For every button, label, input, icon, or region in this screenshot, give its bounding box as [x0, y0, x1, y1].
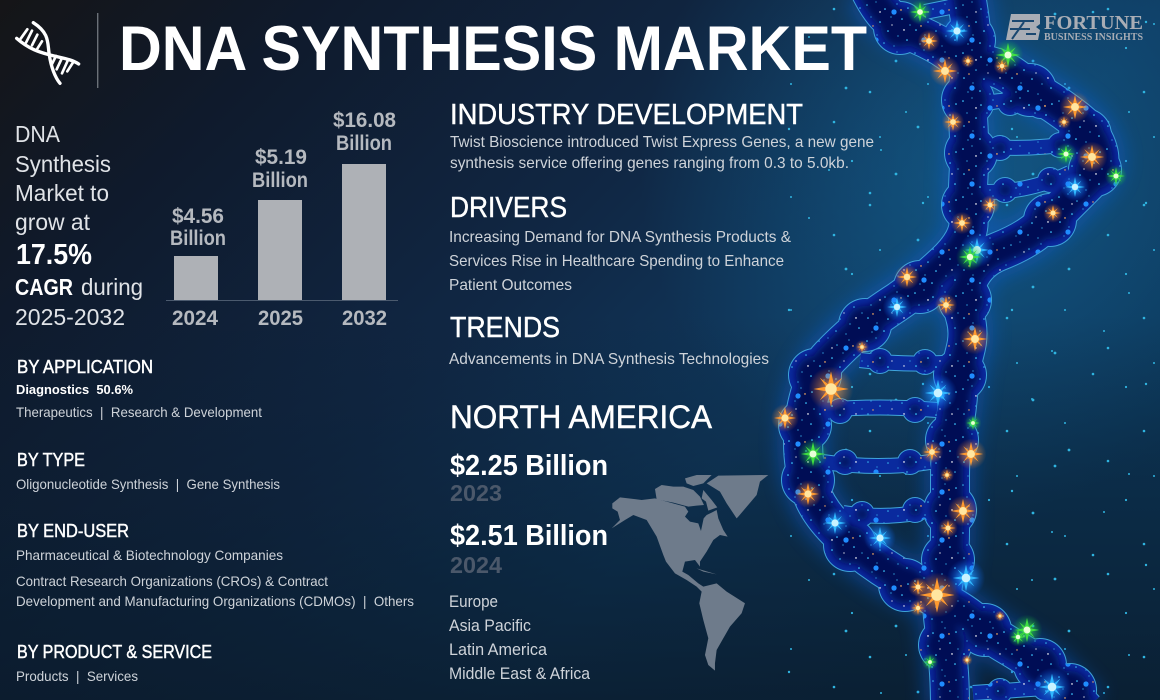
panel: industry development: Twist Bioscience introduced Twist Express Genes, a new gene: [450, 134, 874, 151]
year labels: 2032: [342, 307, 387, 330]
header divider: [97, 13, 98, 88]
value 2024: [450, 520, 608, 578]
panel: by end-user: Development and Manufacturing Organizations (CDMOs) | Others: [16, 593, 414, 609]
panel: by application: BY APPLICATION: [17, 357, 153, 377]
panel: by product and service: [16, 642, 212, 684]
panel: by end-user: BY END-USER: [17, 521, 129, 541]
value 2024: $2.51 Billion: [450, 520, 608, 552]
scattered particles: [770, 0, 1160, 700]
headline: cagr statement: CAGR: [15, 274, 73, 300]
panel: drivers: Services Rise in Healthcare Spending to Enhance: [449, 253, 784, 270]
headline: cagr statement: 2025-2032: [15, 304, 125, 330]
value 2023: 2023: [450, 480, 502, 506]
title: DNA SYNTHESIS MARKET: [119, 14, 867, 84]
panel: drivers: DRIVERS: [450, 192, 567, 224]
headline: cagr statement: grow at: [15, 209, 91, 235]
value labels: $16.08: [333, 109, 396, 132]
year labels: 2024: [172, 307, 218, 330]
panel: by product and service: Products | Services: [16, 668, 138, 684]
headline: cagr statement: [15, 121, 143, 330]
panel: by type: [16, 450, 280, 492]
value labels: $5.19: [255, 146, 307, 169]
headline: cagr statement: during: [81, 274, 143, 300]
other regions list: Europe: [449, 592, 498, 611]
headline: cagr statement: 17.5%: [16, 239, 92, 271]
panel: industry development: INDUSTRY DEVELOPMENT: [450, 99, 803, 131]
panel: by application: [16, 357, 262, 420]
logo: fortune business insights: BUSINESS INSIGHTS: [1044, 32, 1143, 43]
headline: cagr statement: Market to: [15, 180, 109, 206]
panel: north america: NORTH AMERICA: [450, 399, 713, 435]
bar chart: market size: [166, 109, 398, 330]
panel: by end-user: Pharmaceutical & Biotechnology Companies: [16, 547, 283, 563]
logo: fortune business insights: FORTUNE: [1044, 12, 1143, 34]
panel: trends: TRENDS: [450, 312, 560, 344]
value labels: [170, 109, 396, 250]
icon: dna: [17, 23, 79, 83]
panel: industry development: [450, 99, 874, 172]
bar 2025: [258, 200, 302, 300]
other regions list: Asia Pacific: [449, 616, 531, 635]
panel: by type: BY TYPE: [17, 450, 85, 470]
bar 2032: [342, 164, 386, 300]
other regions list: [449, 592, 591, 683]
value 2024: 2024: [450, 552, 502, 578]
other regions list: Latin America: [449, 640, 548, 659]
panel: by product and service: BY PRODUCT & SERVICE: [17, 642, 212, 662]
bar 2024: [174, 256, 218, 300]
panel: north america: [450, 399, 713, 578]
headline: cagr statement: Synthesis: [15, 151, 111, 177]
other regions list: Middle East & Africa: [449, 664, 591, 683]
map: americas: [612, 475, 768, 671]
year labels: [172, 307, 387, 330]
panel: drivers: Increasing Demand for DNA Synthesis Products &: [449, 229, 791, 246]
panel: drivers: Patient Outcomes: [449, 277, 572, 294]
panel: trends: Advancements in DNA Synthesis Technologies: [449, 351, 769, 368]
panel: by type: Oligonucleotide Synthesis | Gene Synthesis: [16, 476, 280, 492]
value labels: Billion: [170, 227, 226, 250]
panel: by end-user: Contract Research Organizations (CROs) & Contract: [16, 573, 328, 589]
value labels: Billion: [336, 132, 392, 155]
panel: by application: Diagnostics 50.6%: [16, 382, 133, 397]
year labels: 2025: [258, 307, 303, 330]
value labels: Billion: [252, 169, 308, 192]
panel: by end-user: [16, 521, 414, 609]
value 2023: [450, 450, 608, 506]
panel: industry development: synthesis service offering genes ranging from 0.3 to 5.0kb.: [450, 155, 849, 172]
value 2023: $2.25 Billion: [450, 450, 608, 482]
panel: trends: [449, 312, 769, 368]
dna helix illustration: [803, 0, 1099, 700]
panel: by application: Therapeutics | Research & Development: [16, 404, 262, 420]
panel: drivers: [449, 192, 791, 294]
headline: cagr statement: DNA: [15, 121, 61, 147]
logo: fortune business insights: [1006, 12, 1143, 43]
dna sparkle stars: [771, 0, 1127, 700]
value labels: $4.56: [172, 205, 224, 228]
